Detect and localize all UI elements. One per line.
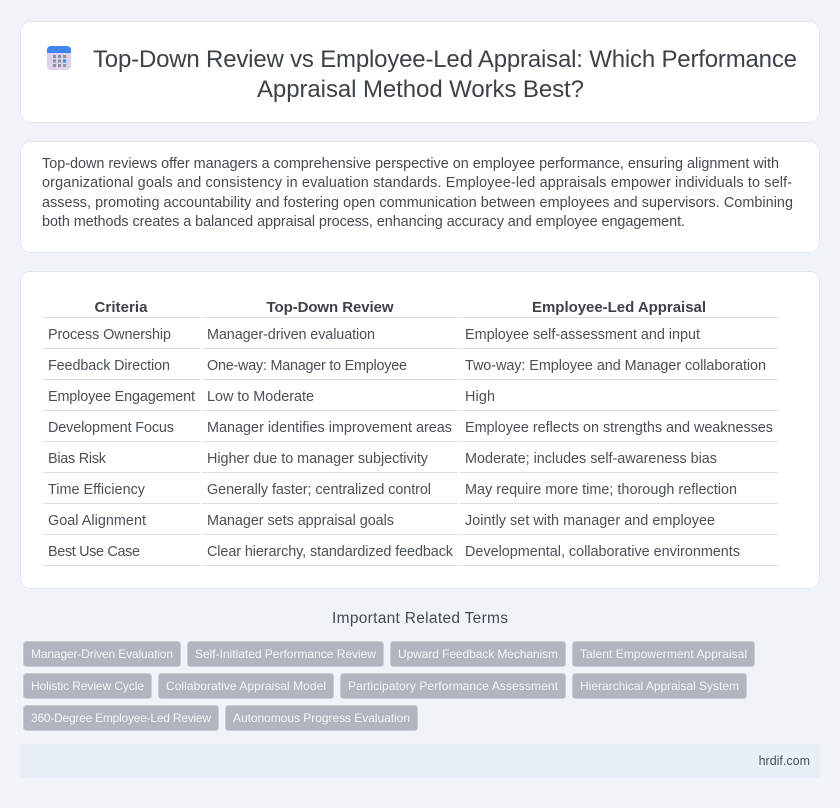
- table row: goal alignment: Goal Alignment: [48, 513, 146, 529]
- table row: time efficiency: Generally faster; centralized control: [207, 482, 431, 498]
- related terms tags: Upward Feedback Mechanism: [398, 647, 558, 661]
- table row: time efficiency: May require more time; thorough reflection: [465, 482, 737, 498]
- table row: employee engagement: High: [465, 389, 495, 405]
- table row: time efficiency: [48, 482, 737, 498]
- related terms tags: Manager-Driven Evaluation: [31, 647, 173, 661]
- related terms tags: Participatory Performance Assessment: [348, 679, 559, 693]
- text block: introduction: organizational goals and consistency in evaluation standards. Employee-led appraisals empower individuals to self-: [42, 175, 792, 191]
- table row: employee engagement: Employee Engagement: [48, 389, 195, 405]
- related terms tags: Holistic Review Cycle: [31, 679, 144, 693]
- panel: title header: [20, 22, 820, 122]
- related terms tags: Autonomous Progress Evaluation: [233, 711, 410, 725]
- related terms tags: Self-Initiated Performance Review: [195, 647, 376, 661]
- table row: bias risk: Bias Risk: [48, 451, 107, 467]
- text block: introduction: Top-down reviews offer managers a comprehensive perspective on employee performance, ensuring alignment with: [42, 156, 779, 172]
- table rules: [43, 318, 778, 566]
- table header: Employee-Led Appraisal: [532, 299, 706, 316]
- related terms tags: Talent Empowerment Appraisal: [580, 647, 747, 661]
- table row: best use case: Developmental, collaborative environments: [465, 544, 740, 560]
- heading: important related terms: Important Related Terms: [332, 610, 508, 627]
- title: Top-Down Review vs Employee-Led Appraisal: Which Performance: [93, 46, 797, 73]
- text block: introduction: both methods creates a balanced appraisal process, enhancing accuracy and employee engagement.: [42, 214, 685, 230]
- related terms tags: Hierarchical Appraisal System: [580, 679, 739, 693]
- table row: process ownership: Employee self-assessment and input: [465, 327, 700, 343]
- table row: development focus: [48, 420, 773, 436]
- panel: introduction: [20, 142, 820, 252]
- table row: employee engagement: [48, 389, 495, 405]
- related terms tags: Collaborative Appraisal Model: [166, 679, 326, 693]
- title: Appraisal Method Works Best?: [257, 76, 584, 103]
- table row: best use case: Clear hierarchy, standardized feedback: [207, 544, 454, 560]
- table row: feedback direction: Two-way: Employee and Manager collaboration: [465, 358, 766, 374]
- related terms tags: [24, 642, 754, 730]
- table row: development focus: Employee reflects on strengths and weaknesses: [465, 420, 773, 436]
- table row: process ownership: [48, 327, 700, 343]
- table row: bias risk: Higher due to manager subjectivity: [207, 451, 429, 467]
- table row: development focus: Manager identifies improvement areas: [207, 420, 452, 436]
- icon: calendar: [47, 46, 71, 70]
- table row: development focus: Development Focus: [48, 420, 174, 436]
- table header: Top-Down Review: [266, 299, 394, 316]
- panel: comparison table: [20, 272, 820, 588]
- footer: [20, 744, 820, 778]
- table header: [94, 299, 706, 316]
- footer: hrdif.com: [759, 754, 810, 768]
- table row: feedback direction: One-way: Manager to Employee: [207, 358, 407, 374]
- table row: employee engagement: Low to Moderate: [207, 389, 314, 405]
- table row: process ownership: Manager-driven evaluation: [207, 327, 375, 343]
- table row: bias risk: Moderate; includes self-awareness bias: [465, 451, 717, 467]
- table row: best use case: [48, 544, 740, 560]
- table row: best use case: Best Use Case: [48, 544, 140, 560]
- table header: Criteria: [94, 299, 148, 316]
- table row: time efficiency: Time Efficiency: [48, 482, 146, 498]
- related terms tags: 360-Degree Employee-Led Review: [31, 711, 211, 725]
- table row: feedback direction: Feedback Direction: [48, 358, 170, 374]
- table row: feedback direction: [48, 358, 766, 374]
- table row: process ownership: Process Ownership: [48, 327, 171, 343]
- table row: goal alignment: Manager sets appraisal goals: [207, 513, 394, 529]
- table row: goal alignment: Jointly set with manager and employee: [465, 513, 715, 529]
- text block: introduction: assess, promoting accountability and fostering open communication between employees and supervisors. Combining: [42, 195, 793, 211]
- table row: bias risk: [48, 451, 717, 467]
- table row: goal alignment: [48, 513, 715, 529]
